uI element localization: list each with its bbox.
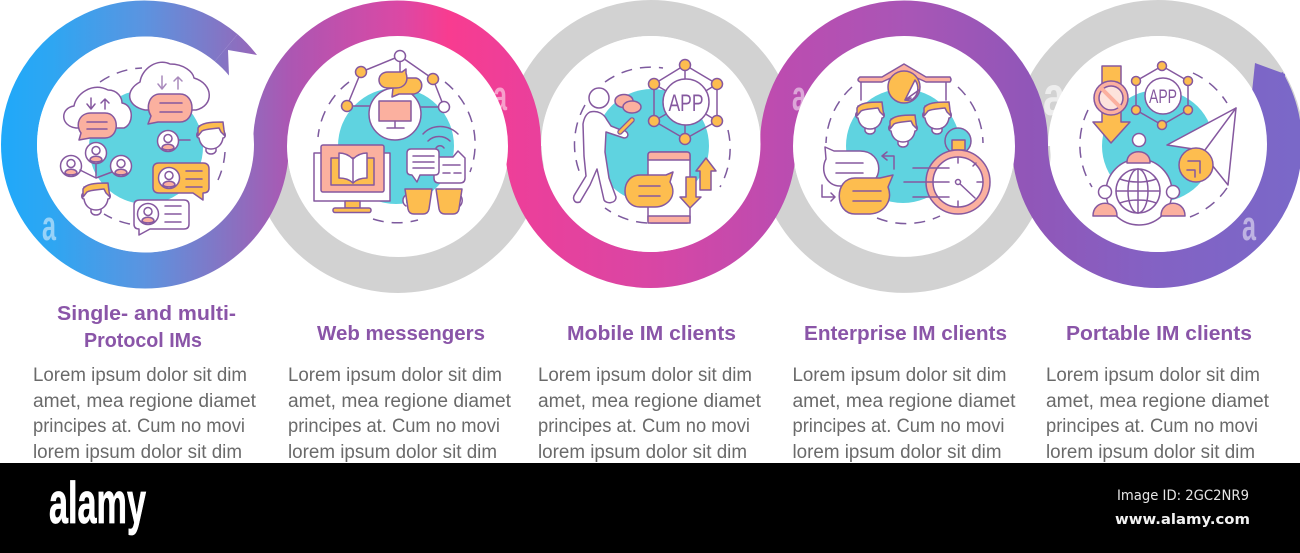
people	[86, 142, 106, 164]
text block 5	[1046, 365, 1270, 463]
desktop with book	[314, 153, 390, 201]
message cards	[434, 151, 465, 183]
website: www.alamy.com	[1115, 512, 1250, 528]
cups	[403, 195, 462, 206]
white bubble	[134, 200, 189, 235]
text block 3: amet, mea regione diamet	[538, 391, 762, 412]
heads	[856, 102, 884, 134]
text block 4	[792, 365, 1016, 463]
watermark letters: a	[493, 72, 507, 119]
footer bar	[0, 463, 1300, 553]
arrow and prohibition sign	[1093, 66, 1130, 143]
icon: portable IM clients: APP	[1149, 87, 1177, 108]
text block 3: Lorem ipsum dolor sit dim	[538, 365, 752, 386]
heading: enterprise IM clients: Enterprise IM clients	[804, 323, 1007, 345]
cloud right	[130, 62, 209, 110]
text block 5: amet, mea regione diamet	[1046, 391, 1270, 412]
icon: enterprise IM clients	[822, 64, 990, 224]
watermark letters: a	[792, 72, 806, 119]
chat bubbles	[824, 147, 879, 186]
text block 1: principes at. Cum no movi	[33, 416, 245, 437]
image id: Image ID: 2GC2NR9	[1117, 488, 1249, 504]
stopwatch	[945, 128, 971, 154]
text block 2: Lorem ipsum dolor sit dim	[288, 365, 502, 386]
text block 5: lorem ipsum dolor sit dim	[1046, 442, 1255, 463]
serpentine gradient ribbon	[19, 19, 1285, 271]
icon: mobile IM clients	[574, 60, 730, 223]
heading: mobile IM clients: Mobile IM clients	[567, 323, 736, 345]
icon: single and multi protocol IMs	[60, 62, 225, 235]
wifi	[423, 126, 458, 148]
text block 4: amet, mea regione diamet	[792, 391, 1016, 412]
white inner discs	[37, 36, 1267, 256]
text block 2: amet, mea regione diamet	[288, 391, 512, 412]
text block 1: amet, mea regione diamet	[33, 391, 257, 412]
people around globe	[1106, 159, 1172, 225]
roof and pie chart	[861, 82, 946, 100]
text block 5: Lorem ipsum dolor sit dim	[1046, 365, 1260, 386]
cloud left	[64, 87, 131, 128]
paper plane	[1167, 108, 1236, 185]
panel: gray rings	[269, 18, 1286, 275]
heading: portable IM clients: Portable IM clients	[1066, 323, 1252, 345]
icon: portable IM clients	[1080, 62, 1236, 225]
heading: single and multi protocol: Single- and multi-	[57, 303, 236, 325]
text block 5: principes at. Cum no movi	[1046, 416, 1258, 437]
text block 1: lorem ipsum dolor sit dim	[33, 442, 242, 463]
text block 4: Lorem ipsum dolor sit dim	[792, 365, 1006, 386]
text block 3: principes at. Cum no movi	[538, 416, 750, 437]
alamy logo: alamy	[49, 471, 146, 536]
text block 4: lorem ipsum dolor sit dim	[792, 442, 1002, 463]
icon: web messengers	[314, 50, 475, 223]
app hexagon	[1136, 66, 1188, 125]
network	[347, 56, 444, 107]
watermark letters: a	[1242, 202, 1256, 249]
person	[589, 88, 609, 108]
heading: single and multi protocol	[57, 303, 236, 352]
text block 3	[538, 365, 762, 463]
watermark letters: a	[42, 202, 56, 249]
heading: web messengers: Web messengers	[317, 323, 485, 345]
text block 3: lorem ipsum dolor sit dim	[538, 442, 747, 463]
watermark letters: a	[1043, 64, 1066, 127]
text block 1	[33, 365, 257, 463]
app hexagon	[654, 65, 717, 139]
text block 2: principes at. Cum no movi	[288, 416, 500, 437]
orange bubble	[153, 163, 209, 200]
heading: single and multi protocol: Protocol IMs	[84, 330, 202, 352]
text block 1: Lorem ipsum dolor sit dim	[33, 365, 247, 386]
watermark letters	[42, 64, 1256, 249]
text block 2	[288, 365, 512, 463]
phone	[648, 152, 690, 223]
text block 2: lorem ipsum dolor sit dim	[288, 442, 497, 463]
text block 4: principes at. Cum no movi	[792, 416, 1004, 437]
icon: mobile IM clients: APP	[668, 90, 704, 117]
